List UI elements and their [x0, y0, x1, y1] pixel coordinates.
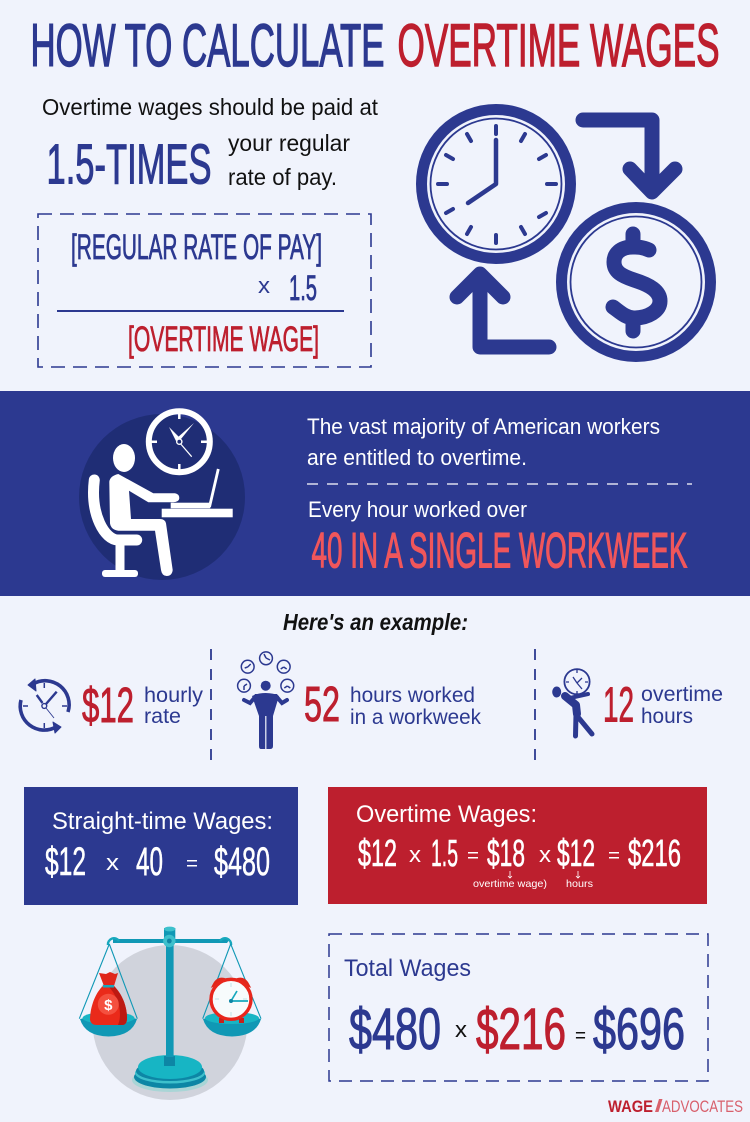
- panel: total wages: $480: [349, 997, 441, 1062]
- panel: overtime entitlement band: Every hour worked over: [308, 497, 527, 522]
- panel: overtime wages: 1.5: [431, 833, 458, 875]
- formula box: [OVERTIME WAGE]: [128, 320, 319, 359]
- panel: total wages: $696: [593, 997, 685, 1062]
- icon: money bag: $: [104, 997, 113, 1014]
- panel: overtime entitlement band: are entitled to overtime.: [307, 445, 527, 470]
- panel: overtime wages: $216: [628, 833, 681, 875]
- intro text: 1.5 times regular rate: your regular: [228, 130, 350, 156]
- example item: overtime hours: 12: [603, 678, 634, 732]
- example item: hourly rate: rate: [144, 705, 181, 728]
- intro text: 1.5 times regular rate: 1.5-TIMES: [46, 132, 212, 196]
- icon: money bag: [90, 972, 127, 1025]
- panel: total wages: Total Wages: [344, 955, 471, 982]
- panel: overtime wages: =: [608, 845, 620, 867]
- panel: total wages: [329, 934, 708, 1081]
- illustration: balance scale with money and clock: [79, 927, 261, 1100]
- logo: Wage Advocates: [608, 1097, 743, 1116]
- example heading: Here's an example:: [283, 609, 468, 635]
- panel: total wages: $216: [476, 997, 566, 1062]
- formula box: 1.5: [289, 269, 317, 308]
- example item: hours worked: hours worked: [350, 684, 475, 707]
- panel: total wages: =: [575, 1025, 586, 1047]
- panel: total wages: x: [455, 1017, 467, 1042]
- icon: worker at laptop with clock: [79, 411, 245, 580]
- example item: hourly rate: $12: [82, 679, 134, 733]
- panel: overtime wages: [328, 787, 707, 904]
- title: HOW TO CALCULATE: [30, 12, 385, 79]
- intro text: 1.5 times regular rate: [42, 94, 379, 196]
- panel: straight-time wages: 40: [136, 840, 163, 884]
- panel: overtime wages: $12: [358, 833, 397, 875]
- example item: overtime hours: hours: [641, 705, 693, 728]
- panel: overtime entitlement band: The vast majority of American workers: [307, 414, 660, 439]
- panel: overtime wages: overtime wage): [473, 878, 547, 890]
- formula box: x: [258, 273, 270, 298]
- intro text: 1.5 times regular rate: Overtime wages should be paid at: [42, 94, 379, 120]
- panel: straight-time wages: $12: [45, 840, 86, 884]
- panel: overtime wages: x: [409, 842, 421, 867]
- example item: hours worked: in a workweek: [350, 706, 481, 729]
- logo: Wage Advocates: WAGE: [608, 1097, 653, 1116]
- example item: hours worked: [238, 652, 481, 749]
- formula box: [38, 214, 371, 367]
- panel: straight-time wages: =: [186, 853, 198, 875]
- panel: overtime wages: Overtime Wages:: [356, 801, 537, 828]
- intro text: 1.5 times regular rate: rate of pay.: [228, 164, 337, 190]
- panel: overtime wages: $12: [557, 833, 595, 875]
- example item: overtime hours: overtime: [641, 683, 723, 706]
- example item: hours worked: 52: [304, 678, 340, 732]
- panel: straight-time wages: x: [106, 850, 119, 875]
- panel: straight-time wages: Straight-time Wages:: [52, 808, 273, 835]
- panel: straight-time wages: [24, 787, 298, 905]
- panel: overtime wages: $18: [487, 833, 525, 875]
- panel: overtime wages: hours: [566, 878, 593, 890]
- icon: clock and coin exchange: [422, 110, 710, 356]
- panel: overtime wages: =: [467, 845, 479, 867]
- icon: man carrying clock: [552, 669, 592, 736]
- example item: hourly rate: hourly: [144, 684, 204, 707]
- panel: overtime entitlement band: [0, 391, 750, 596]
- icon: man juggling clocks: [238, 652, 294, 749]
- icon: clock with circular arrows: [20, 679, 69, 733]
- icon: alarm clock: [211, 979, 251, 1023]
- example item: overtime hours: [552, 669, 723, 736]
- panel: overtime wages: x: [539, 842, 551, 867]
- example item: hourly rate: [20, 679, 204, 733]
- formula box: [REGULAR RATE OF PAY]: [71, 228, 322, 267]
- panel: straight-time wages: $480: [214, 840, 270, 884]
